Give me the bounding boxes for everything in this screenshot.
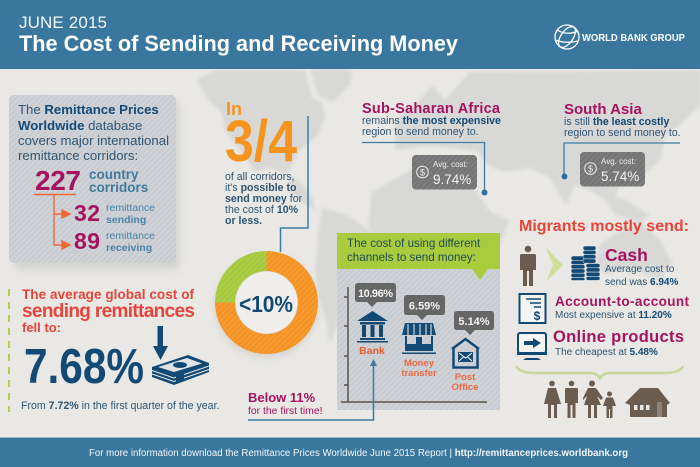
32 remittance sending: remittance xyxy=(106,202,155,214)
intro text: The xyxy=(18,102,44,117)
227 country corridors: country xyxy=(89,167,139,182)
South Asia callout xyxy=(562,101,681,186)
icon: coins xyxy=(571,246,600,280)
world map background xyxy=(197,69,700,350)
connector line xyxy=(280,116,308,252)
green heading: channels to send money: xyxy=(347,251,476,264)
cost badge: $ xyxy=(588,164,593,174)
heading: The average global cost of xyxy=(22,287,194,302)
description: or less. xyxy=(225,215,262,227)
description: for xyxy=(287,193,303,205)
brace xyxy=(516,366,683,378)
panel: remittance database xyxy=(9,95,179,270)
icon: globe xyxy=(555,24,579,50)
227 country corridors: 227 xyxy=(35,165,81,196)
icon: money stack xyxy=(152,355,209,385)
intro text: remittance corridors: xyxy=(18,148,138,163)
below 11 note: Below 11% xyxy=(248,390,316,405)
icon: monitor xyxy=(517,333,547,360)
bubble: bank: 10.96% xyxy=(358,288,393,300)
Sub-Saharan Africa callout: region to send money to. xyxy=(362,126,479,138)
average global cost block xyxy=(9,287,219,412)
icon: house xyxy=(625,388,670,417)
89 remittance receiving: 89 xyxy=(74,228,100,254)
World Bank Group logo: WORLD BANK GROUP xyxy=(582,33,685,44)
description: 10% xyxy=(277,204,299,216)
account-to-account text xyxy=(555,294,690,321)
below 11 note: for the first time! xyxy=(248,406,322,417)
32 remittance sending xyxy=(74,200,155,226)
cost badge: 9.74% xyxy=(433,172,471,187)
bubble: money transfer: 6.59% xyxy=(409,300,440,312)
heading: fell to: xyxy=(22,320,61,335)
donut chart: <10% xyxy=(239,291,293,317)
description: it's xyxy=(225,182,241,194)
account-to-account text: Account-to-account xyxy=(555,294,690,309)
icon: post office xyxy=(452,339,479,368)
cash text: send was 6.94% xyxy=(605,277,678,288)
intro text: Worldwide xyxy=(18,118,84,133)
heading xyxy=(22,287,195,335)
description: send money xyxy=(225,193,287,205)
World Bank Group logo xyxy=(555,24,685,50)
heading: sending remittances xyxy=(22,301,195,322)
cost badge: $ xyxy=(420,168,425,178)
panel: channel cost xyxy=(337,233,500,410)
label: bank: Bank xyxy=(359,345,385,357)
description: the cost of xyxy=(225,204,277,216)
orange connector arrows xyxy=(34,194,76,249)
donut chart xyxy=(215,251,318,357)
online products text: The cheapest at 5.48% xyxy=(555,347,658,358)
Sub-Saharan Africa callout: Sub-Saharan Africa xyxy=(362,101,501,117)
green heading: The cost of using different xyxy=(347,237,481,250)
cash text: Average cost to xyxy=(605,264,675,275)
bubble: post office xyxy=(454,311,494,335)
cost badge: Avg. cost: xyxy=(433,160,468,169)
32 remittance sending: 32 xyxy=(74,200,100,226)
label: post office: Post xyxy=(455,372,476,383)
arrow to bank xyxy=(248,359,377,420)
cost badge xyxy=(580,152,645,186)
89 remittance receiving xyxy=(74,228,155,254)
227 country corridors xyxy=(35,165,148,196)
icon: family xyxy=(544,380,616,418)
cost badge: Avg. cost: xyxy=(601,157,636,166)
footer bar xyxy=(0,437,700,467)
cash text: Cash xyxy=(605,245,648,265)
South Asia callout: is still xyxy=(564,116,593,128)
below 11 note xyxy=(248,390,322,417)
label: money transfer xyxy=(401,358,437,379)
account-to-account text: Most expensive at 11.20% xyxy=(555,310,672,321)
fraction: 3/4 xyxy=(225,109,297,174)
green heading xyxy=(337,233,500,280)
label: post office xyxy=(452,372,478,393)
online products text xyxy=(553,328,684,358)
label: money transfer: Money xyxy=(404,358,435,369)
icon: bank statement: $ xyxy=(534,309,541,323)
Sub-Saharan Africa callout: the most expensive xyxy=(403,115,501,127)
89 remittance receiving: remittance xyxy=(106,230,155,242)
icon: bank statement xyxy=(520,294,546,323)
icon: store xyxy=(402,323,436,354)
big number: 7.68% xyxy=(24,340,144,394)
Sub-Saharan Africa callout: remains xyxy=(362,115,403,127)
Migrants heading: Migrants mostly send: xyxy=(519,218,689,235)
icon: chevron xyxy=(546,248,563,282)
South Asia callout: the least costly xyxy=(593,116,669,128)
32 remittance sending: sending xyxy=(106,214,146,226)
South Asia callout: region to send money to. xyxy=(564,127,681,139)
icon: bank xyxy=(357,311,388,342)
bubble: money transfer xyxy=(404,295,445,320)
cash text xyxy=(605,245,678,288)
three quarters callout xyxy=(225,99,303,227)
intro text: database xyxy=(84,118,142,133)
icon: person xyxy=(520,246,536,286)
label: post office: Office xyxy=(452,382,478,393)
note: From 7.72% in the first quarter of the year. xyxy=(21,400,219,412)
three quarters callout: In xyxy=(226,99,242,119)
icon: down arrow xyxy=(153,326,168,360)
South Asia callout: South Asia xyxy=(564,101,642,118)
Sub-Saharan Africa callout xyxy=(362,101,501,196)
title: The Cost of Sending and Receiving Money xyxy=(19,31,459,56)
intro text: covers major international xyxy=(18,133,169,148)
description: of all corridors, xyxy=(225,171,294,183)
header bar xyxy=(0,0,700,69)
227 country corridors: corridors xyxy=(89,180,148,195)
axes xyxy=(341,287,487,402)
footer text: For more information download the Remittance Prices Worldwide June 2015 Report | http://remittanceprices.worldbank.org xyxy=(89,448,628,459)
date: JUNE 2015 xyxy=(19,13,107,32)
label: money transfer: transfer xyxy=(401,368,437,379)
intro text: Remittance Prices xyxy=(44,102,159,117)
cost badge xyxy=(412,155,477,190)
bubble: post office: 5.14% xyxy=(458,316,490,328)
cost badge: 5.74% xyxy=(601,169,639,184)
online products text: Online products xyxy=(553,328,684,346)
description: possible to xyxy=(241,182,297,194)
bubble: bank xyxy=(355,283,396,307)
89 remittance receiving: receiving xyxy=(106,242,152,254)
